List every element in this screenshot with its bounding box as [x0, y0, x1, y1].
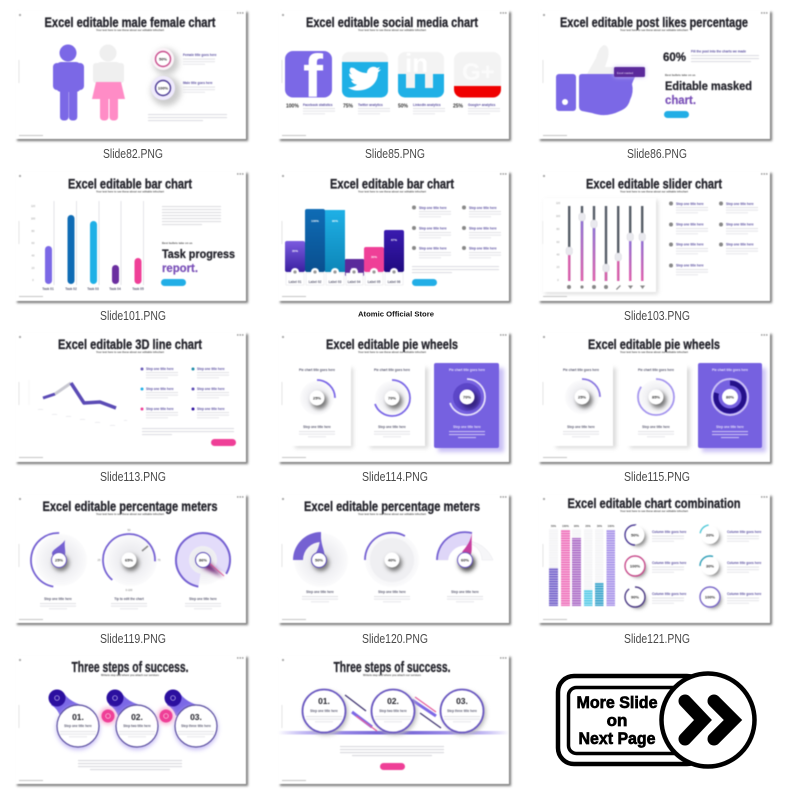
- title: Excel editable pie wheels: [588, 336, 720, 352]
- progress rings: 30%: [706, 564, 714, 568]
- card: 70% wheel: Step one title here: [378, 425, 406, 429]
- text: male title: Male title goes here: [183, 81, 213, 85]
- pie: male 100%: [151, 76, 181, 106]
- meter: 65%: 25: [98, 558, 101, 562]
- bar chart: 67%: [391, 238, 397, 242]
- slide: slider chart: [538, 171, 772, 303]
- card: 70% wheel: [360, 364, 428, 448]
- slider chart: 80: [557, 227, 560, 231]
- stacked bar chart: 100%: [608, 524, 615, 528]
- item list: Column title goes here: [652, 561, 687, 565]
- slide: 3d bar chart: [278, 171, 511, 303]
- step 1: Step one title here: [310, 709, 338, 713]
- text block: [142, 428, 234, 435]
- stacked bar chart: 50%: [551, 524, 557, 528]
- bar chart: 20: [32, 266, 35, 270]
- meter: 60%: [437, 532, 493, 602]
- item list: Step one title here: [676, 264, 704, 268]
- button: [380, 763, 405, 770]
- heading: editable masked chart: [665, 73, 752, 107]
- step 3: [440, 690, 486, 735]
- step 3: [164, 690, 218, 750]
- stat: facebook: [286, 103, 335, 114]
- slider chart: 40: [557, 252, 560, 256]
- title: Excel editable bar chart: [68, 176, 192, 192]
- step 3: Step three title here: [447, 709, 477, 713]
- card: highlighted 80% wheel: Pie chart title goes here: [712, 368, 748, 372]
- stacked bar chart: 90%: [574, 524, 580, 528]
- slide: percentage meters 119: Your text here to see these about our editable infochart: [96, 512, 164, 516]
- slide: percentage meters 119: [15, 494, 248, 625]
- item list: Step one title here: [419, 246, 447, 250]
- slide: pie wheels 25 85 80: Your text here to see these about our editable infochart: [620, 350, 688, 354]
- text block: [78, 760, 182, 770]
- bar chart: Task 02: [65, 287, 77, 291]
- badge: more slide on next page: Next Page: [578, 729, 656, 748]
- button: [664, 111, 689, 118]
- slide: social media chart: Your text here to see these about our editable infochart: [358, 28, 426, 32]
- slide: chart combination: [538, 494, 772, 625]
- bar chart: Label 06: [388, 280, 401, 284]
- button: [211, 439, 236, 446]
- heading: task progress report: [162, 241, 235, 275]
- step 2: 02.: [131, 712, 143, 722]
- bar chart: 10%: [351, 267, 357, 271]
- heading: task progress report: Best bullets take on us: [162, 241, 193, 245]
- stat: facebook: Facebook statistics: [303, 103, 333, 107]
- slide: 3d bar chart: Your text here to see these about our editable infochart: [358, 190, 426, 194]
- step 1: [48, 690, 100, 750]
- item list: Step one title here: [197, 407, 225, 411]
- step 1: [302, 690, 348, 735]
- card: highlighted 70% wheel: Step one title here: [453, 425, 481, 429]
- slide: post likes percentage: Your text here to see these about our editable infochart: [620, 28, 688, 32]
- card: 85% wheel: Pie chart title goes here: [638, 368, 674, 372]
- item list: Column title goes here: [652, 530, 687, 534]
- meter: 50%: Step one title here: [306, 590, 334, 594]
- text: female title: Female title goes here: [183, 53, 217, 57]
- item list: [652, 530, 762, 604]
- step 2: [106, 690, 159, 750]
- item list: Step one title here: [676, 242, 704, 246]
- card: highlighted 80% wheel: 80%: [726, 394, 734, 400]
- meter: 40%: 40%: [388, 558, 396, 562]
- pie: male 100%: 100%: [158, 86, 169, 90]
- slide: bar chart task progress: Your text here to see these about our editable infochart: [96, 190, 164, 194]
- title: Excel editable percentage meters: [42, 498, 218, 514]
- slide: three steps with nodes: [15, 655, 248, 786]
- bar chart: Label 01: [289, 280, 302, 284]
- card: highlighted 70% wheel: [434, 363, 504, 452]
- title: Excel editable chart combination: [568, 495, 740, 511]
- stat: google: [453, 103, 500, 114]
- meter: 65%: 50: [128, 528, 131, 532]
- bar chart: Task 03: [87, 287, 99, 291]
- meter: 25%: Step one title here: [44, 597, 72, 601]
- caption: Slide114.PNG: [362, 470, 428, 484]
- title: Excel editable slider chart: [586, 176, 722, 192]
- item list: Step one title here: [197, 387, 225, 391]
- text block: [148, 114, 227, 121]
- item list: Step one title here: [676, 202, 704, 206]
- card: 25% wheel: [285, 364, 353, 448]
- bar chart: Task 05: [132, 287, 144, 291]
- slide: slider chart: Your text here to see these about our editable infochart: [620, 190, 688, 194]
- item list: Step one title here: [469, 206, 497, 210]
- item list: Step one title here: [146, 407, 174, 411]
- text: male title: [183, 81, 215, 93]
- text block: [340, 746, 444, 756]
- stat: linkedin: LinkedIn analytics: [413, 103, 441, 107]
- caption: Slide85.PNG: [365, 147, 425, 161]
- card: 70% wheel: Pie chart title goes here: [374, 368, 410, 372]
- slider chart: 60: [557, 240, 560, 244]
- bar chart: [285, 209, 404, 285]
- progress rings: 100%: [630, 564, 641, 568]
- slide: percentage meters 120: [278, 494, 511, 625]
- item list: Step one title here: [197, 367, 225, 371]
- meter: 86%: [172, 529, 234, 609]
- card: 25% wheel: 25%: [578, 394, 586, 400]
- meter: 65%: [92, 523, 166, 609]
- title: Three steps of success.: [334, 659, 450, 676]
- bar chart: 100%: [311, 219, 319, 223]
- stat: twitter: [343, 103, 390, 114]
- meter: 65%: Tip to edit the chart: [114, 597, 145, 601]
- caption: Slide121.PNG: [624, 632, 690, 646]
- heading: editable masked chart: chart.: [665, 93, 696, 107]
- slide: pie wheels 25 70 70: Your text here to see these about our editable infochart: [358, 350, 426, 354]
- bar chart: 60: [32, 241, 35, 245]
- progress rings: 50%: [631, 532, 639, 538]
- slide: percentage meters 120: Your text here to see these about our editable infochart: [358, 512, 426, 516]
- item list: Step one title here: [726, 242, 754, 246]
- caption: Slide120.PNG: [362, 632, 428, 646]
- text block: [162, 206, 221, 225]
- icon: linkedin tile: [398, 48, 444, 98]
- item list: Step one title here: [676, 222, 704, 226]
- card: 25% wheel: Step one title here: [303, 425, 331, 429]
- item list: Column title goes here: [727, 561, 762, 565]
- stat: 60%: 60%: [663, 50, 686, 64]
- step 2: Step two title here: [379, 709, 407, 713]
- stat: google: 25%: [453, 104, 464, 110]
- stat: twitter: 75%: [343, 104, 354, 110]
- title: Excel editable 3D line chart: [58, 336, 202, 352]
- icon: male figure: [53, 44, 84, 120]
- caption: Slide101.PNG: [100, 309, 166, 323]
- caption: Slide115.PNG: [624, 470, 690, 484]
- title: Excel editable pie wheels: [326, 336, 458, 352]
- slider chart: 0: [557, 278, 559, 282]
- slider chart: 100: [556, 214, 561, 218]
- bar chart: 30%: [371, 255, 377, 259]
- card: 25% wheel: Step one title here: [567, 425, 595, 429]
- icon: female figure: [92, 44, 125, 120]
- card: 85% wheel: Step one title here: [642, 425, 670, 429]
- icon: google plus tile: G+: [462, 59, 495, 86]
- pie: female 50%: 50%: [159, 56, 167, 62]
- card: highlighted 70% wheel: Pie chart title goes here: [449, 368, 485, 372]
- item list: Step one title here: [146, 387, 174, 391]
- stacked bar chart: 100%: [562, 524, 570, 528]
- card: 70% wheel: 70%: [388, 396, 396, 400]
- item list: Step one title here: [469, 226, 497, 230]
- item list: Step one title here: [726, 202, 754, 206]
- step 3: Step three title here: [181, 724, 211, 728]
- badge: more slide on next page: on: [607, 711, 627, 730]
- stat: twitter: Twitter analytics: [358, 103, 383, 107]
- step 1: Step one title here: [64, 724, 92, 728]
- stat: google: Google+ analytics: [468, 103, 496, 107]
- meter: 65%: 75: [158, 558, 161, 562]
- title: Excel editable male female chart: [44, 14, 216, 30]
- icon: linkedin tile: in: [405, 48, 428, 78]
- card: 25% wheel: [548, 364, 616, 448]
- bar chart: Label 02: [309, 280, 322, 284]
- meter: 25%: 25%: [55, 558, 63, 562]
- icon: double chevron arrow: [685, 701, 733, 739]
- slide: 3d line chart: Your text here to see these about our editable infochart: [96, 350, 164, 354]
- text: female title: [183, 53, 217, 65]
- title: Excel editable percentage meters: [304, 498, 480, 514]
- caption: Slide103.PNG: [624, 309, 690, 323]
- heading: task progress report: Task progress: [162, 247, 235, 261]
- progress rings: 90%: [631, 594, 639, 600]
- item list: Column title goes here: [727, 530, 762, 534]
- bar chart: Task 04: [109, 287, 121, 291]
- meter: 65%: 0-100: [126, 588, 133, 592]
- step 1: 01.: [318, 696, 330, 706]
- item list: Step one title here: [146, 367, 174, 371]
- item list: Column title goes here: [727, 592, 762, 596]
- item list: [669, 202, 758, 275]
- slide: pie wheels 25 85 80: [538, 332, 772, 464]
- slider chart: 120: [556, 201, 561, 205]
- slide: male female chart: [15, 10, 248, 141]
- pink connector nodes: [100, 708, 174, 724]
- step 2: Step two title here: [123, 724, 151, 728]
- meter: 86%: Step one title here: [189, 597, 217, 601]
- pie: female 50%: [152, 48, 179, 75]
- progress rings: 100%: [705, 594, 716, 600]
- bar chart: 0: [32, 278, 34, 282]
- slide: pie wheels 25 70 70: [278, 332, 511, 464]
- stat: linkedin: [398, 103, 445, 114]
- bar chart: 40: [32, 254, 35, 258]
- icon: twitter tile: [342, 52, 388, 98]
- bar chart: 120: [31, 204, 36, 208]
- meter: 25%: [27, 529, 89, 609]
- title: Excel editable bar chart: [330, 176, 454, 192]
- item list: Step one title here: [726, 222, 754, 226]
- meter: 60%: Step one title here: [451, 590, 479, 594]
- bar chart: [31, 201, 144, 291]
- heading: task progress report: report.: [162, 261, 198, 275]
- heading: editable masked chart: Best bullets take on us: [665, 73, 696, 77]
- stacked bar chart: 30%: [597, 524, 603, 528]
- slide: male female chart: Your text here to see these about our editable infochart: [96, 28, 164, 32]
- bar chart: Task 01: [42, 287, 54, 291]
- meter: 40%: Step one title here: [378, 590, 406, 594]
- slide: social media chart: [278, 10, 511, 141]
- bar chart: Label 03: [329, 280, 342, 284]
- slider chart: [543, 198, 658, 294]
- heading: editable masked chart: Editable masked: [665, 79, 752, 93]
- caption: Slide86.PNG: [627, 147, 687, 161]
- slide: 3d line chart: [15, 332, 248, 464]
- step 1: 01.: [72, 712, 84, 722]
- bar chart: Label 05: [368, 280, 381, 284]
- slider chart: 20: [557, 265, 560, 269]
- text block: [412, 266, 499, 273]
- caption: Slide113.PNG: [100, 470, 166, 484]
- bar chart: 35%: [292, 249, 298, 253]
- line chart: [29, 380, 127, 426]
- badge: more slide on next page: [558, 674, 754, 766]
- item list: Step one title here: [469, 246, 497, 250]
- progress rings: 20%: [706, 532, 714, 538]
- bar chart: 80: [32, 229, 35, 233]
- meter: 50%: [293, 532, 348, 602]
- bar chart: Label 04: [348, 280, 361, 284]
- caption: Slide82.PNG: [103, 147, 163, 161]
- icon: google plus tile: [454, 52, 501, 98]
- button: [412, 279, 437, 286]
- progress rings: [625, 523, 722, 608]
- text: stat note: Fill the post into the charts we made: [691, 50, 746, 54]
- icon: thumbs up masked chart: Excel masked: [617, 71, 634, 75]
- step 2: 02.: [387, 696, 399, 706]
- item list: Step one title here: [419, 226, 447, 230]
- card: 25% wheel: Pie chart title goes here: [299, 368, 335, 372]
- card: 85% wheel: [624, 364, 690, 448]
- meter: 86%: 86%: [199, 558, 207, 562]
- icon: thumbs up masked chart: [556, 45, 645, 115]
- stacked bar chart: 20%: [585, 524, 591, 528]
- slide: chart combination: Your text here to see these about our editable infochart: [620, 509, 688, 513]
- slide: three steps with band: Write/a step and where you attach our services: [363, 673, 422, 677]
- stacked bar chart: [549, 524, 615, 606]
- item list: Column title goes here: [652, 592, 687, 596]
- meter: 60%: 60%: [461, 558, 469, 562]
- step 3: 03.: [456, 696, 468, 706]
- item list: Step one title here: [419, 206, 447, 210]
- slide: bar chart task progress: [15, 171, 248, 303]
- step 3: 03.: [190, 712, 202, 722]
- card: highlighted 70% wheel: 70%: [463, 394, 471, 400]
- meter: 50%: 50%: [315, 558, 323, 562]
- slide: three steps with nodes: Write/a step and where you attach our services: [101, 673, 160, 677]
- text: stat note: [691, 50, 759, 62]
- bar chart: 100: [31, 216, 36, 220]
- decorative band and diagonals: [278, 695, 509, 734]
- bar chart: 90%: [332, 219, 338, 223]
- caption: Slide119.PNG: [100, 632, 166, 646]
- slide: three steps with band: [278, 655, 511, 786]
- button: [161, 279, 186, 286]
- meter: 65%: 65%: [125, 558, 133, 562]
- step 2: [372, 690, 417, 735]
- card: 25% wheel: Pie chart title goes here: [563, 368, 599, 372]
- icon: facebook tile: [285, 43, 332, 110]
- item list: [412, 206, 501, 258]
- caption: store name: Atomic Official Store: [358, 310, 434, 318]
- card: 25% wheel: 25%: [313, 396, 321, 400]
- card: highlighted 80% wheel: Step one title here: [716, 425, 744, 429]
- item list: [140, 367, 229, 418]
- meter: 40%: [365, 533, 419, 602]
- card: highlighted 80% wheel: [698, 363, 766, 452]
- slide: post likes percentage: [538, 10, 772, 141]
- stat: linkedin: 50%: [398, 104, 409, 110]
- badge: more slide on next page: More Slide: [576, 693, 658, 712]
- title: Excel editable social media chart: [306, 14, 478, 30]
- icon: facebook tile: f: [303, 43, 324, 110]
- title: Excel editable post likes percentage: [560, 14, 748, 30]
- title: Three steps of success.: [72, 659, 188, 676]
- card: 85% wheel: 85%: [652, 394, 660, 400]
- stat: facebook: 100%: [286, 104, 299, 110]
